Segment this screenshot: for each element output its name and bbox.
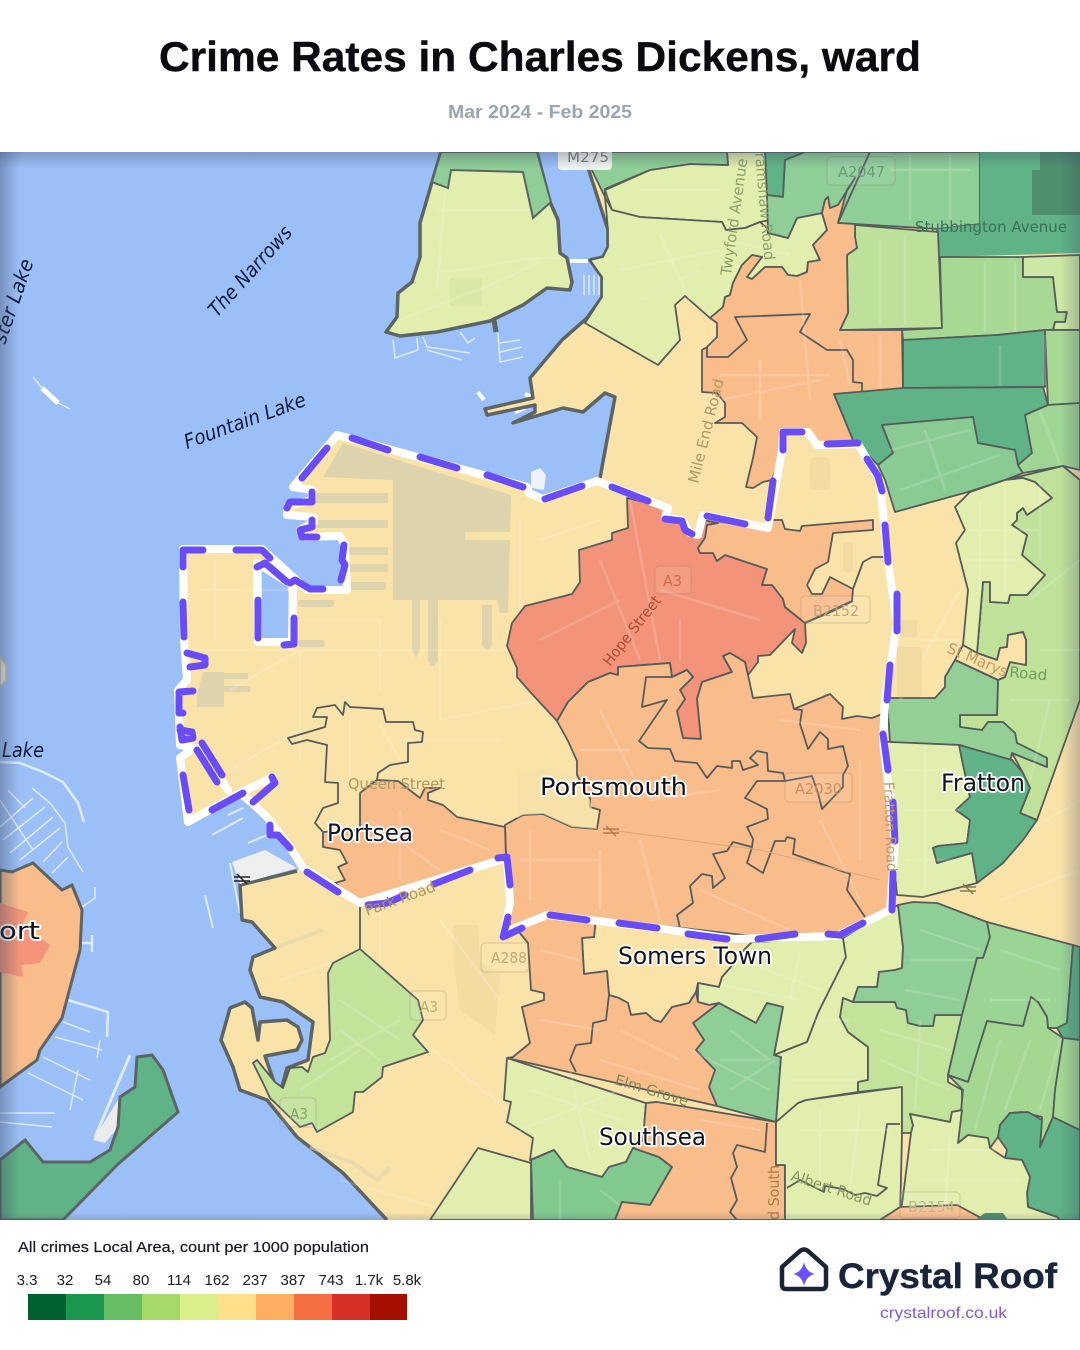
albert road: Albert Road: [789, 1167, 874, 1210]
dark green top strip: [765, 152, 805, 197]
lsoa: b2154 dark green corner: [975, 1213, 1008, 1220]
ramshaw road: ramshaw Road: [751, 152, 778, 261]
fratton station icon: [960, 884, 976, 894]
a3 south west: A3: [290, 1105, 308, 1123]
lsoa: fratton lime: [883, 741, 977, 897]
land base yellow: [178, 152, 1080, 1220]
green band: [838, 152, 980, 229]
green block 2: [902, 257, 1067, 340]
b2154: B2154: [908, 1198, 955, 1216]
portsmouth station icon: [603, 826, 619, 836]
dark band north east: [938, 152, 1080, 257]
twyford avenue: Twyford Avenue: [717, 157, 751, 278]
lsoa: somers town lime: [698, 938, 846, 1055]
lsoa: east mid green: [960, 466, 1080, 820]
place labels: [0, 769, 1025, 1151]
fratton road: Fratton Road: [880, 782, 899, 872]
marinas and jetties: [0, 261, 599, 1137]
pale shore fragment: [0, 657, 6, 687]
lsoa: green next: [948, 997, 1063, 1148]
lsoa: east lime: [776, 1087, 902, 1220]
lsoa: south orange: [507, 912, 719, 1106]
portsea street texture: [190, 520, 1080, 1220]
legend colour bar: [28, 1294, 407, 1320]
gosport red area: [0, 903, 50, 977]
a3: A3: [663, 572, 682, 590]
island light green: [386, 152, 572, 336]
lsoa: north east greens: [834, 387, 1080, 512]
a288 shield: [481, 943, 529, 972]
lsoa: east edge dark column: [1057, 945, 1080, 1040]
lsoa: southsea orange: [615, 1102, 785, 1220]
lsoa: south east lime: [900, 1110, 1060, 1220]
water labels: [0, 221, 309, 762]
mid green block: [840, 225, 942, 330]
north lime block 1: [605, 152, 770, 230]
queen street: Queen Street: [348, 775, 445, 793]
station park patch: [517, 768, 597, 829]
inner boundary: [707, 314, 862, 392]
coastline south: [221, 871, 387, 1220]
pier: [494, 320, 496, 332]
legend scale labels: 114: [167, 1272, 191, 1289]
lsoa: north greens: [765, 152, 1080, 405]
ferry terminal: [232, 850, 297, 884]
north green strip: [583, 152, 728, 197]
street texture south: [520, 930, 1060, 1220]
ferry station icon: [234, 874, 250, 884]
dark green block: [903, 330, 1045, 388]
gosport jetty: [93, 1100, 120, 1143]
footer legend and logo: [17, 1239, 1058, 1322]
website link: crystalroof.co.uk: [880, 1305, 1008, 1322]
legend scale labels: 80: [133, 1272, 149, 1289]
road labels: [290, 150, 1067, 1220]
map edge shading: [0, 152, 1080, 1220]
ort: ort: [0, 917, 40, 945]
dockyard grey blocks: [197, 443, 511, 707]
road shields: [280, 148, 960, 1218]
dockyard basin water: [262, 568, 292, 642]
date range subtitle: Mar 2024 - Feb 2025: [448, 101, 632, 122]
orange inner line: [730, 1123, 767, 1220]
park road: Park Road: [362, 878, 438, 920]
east edge mid green: [1053, 1038, 1080, 1130]
lsoa: southsea green: [531, 1148, 672, 1220]
lsoa: st marys yellow: [955, 632, 1026, 680]
lsoa: mid green block: [840, 998, 962, 1133]
a3 south: A3: [420, 998, 438, 1016]
lsoa: south east dark green: [998, 1112, 1080, 1220]
a2047: A2047: [838, 163, 885, 181]
choropleth map: [0, 152, 1080, 1220]
a288: A288: [491, 949, 527, 967]
east lime inner line: [787, 1124, 900, 1196]
road east: Road: [1009, 663, 1048, 684]
lsoa: portsea orange: [323, 780, 506, 903]
legend scale labels: 3.3: [17, 1272, 37, 1289]
lime block east: [1023, 255, 1080, 330]
coastline north: [485, 152, 615, 478]
lsoa: southsea green: [253, 949, 428, 1132]
harbour jetty at boundary: [531, 468, 546, 490]
lsoa: somers town yellow: [582, 918, 752, 1022]
north lime block 2: [585, 197, 827, 365]
header: [159, 33, 921, 122]
b2152: B2152: [813, 602, 859, 620]
lsoa: green block: [693, 1003, 783, 1122]
b2154 shield: [900, 1192, 960, 1218]
m275 shield: [558, 148, 612, 170]
legend scale labels: 54: [95, 1272, 111, 1289]
legend scale labels: 5.8k: [393, 1272, 422, 1289]
dotted park patches: [810, 457, 922, 697]
green east: [1018, 403, 1080, 473]
portsmouth: Portsmouth: [540, 773, 687, 801]
lsoa: green block north: [853, 902, 990, 1026]
b2152 shield: [801, 596, 870, 623]
lsoa: st marys green: [887, 660, 1047, 767]
island green north block: [432, 152, 551, 218]
logo wordmark: Crystal Roof: [838, 1257, 1057, 1296]
a3 south shield: [410, 991, 446, 1020]
legend scale labels: 1.7k: [355, 1272, 384, 1289]
d south: d South: [765, 1165, 783, 1220]
legend scale labels: 387: [280, 1272, 306, 1289]
somers town: Somers Town: [618, 942, 772, 970]
legend scale labels: 237: [242, 1272, 268, 1289]
lsoa: central orange: [505, 653, 895, 939]
north orange area: [702, 178, 903, 488]
logo icon: [782, 1250, 826, 1289]
green lower: [878, 417, 1023, 512]
title: Crime Rates in Charles Dickens, ward: [159, 33, 921, 80]
water background: [0, 152, 1080, 1220]
railway line: [610, 830, 880, 880]
lsoa: southsea lime: [504, 1058, 661, 1177]
fountain lake: Fountain Lake: [181, 387, 309, 454]
area: whale island: [386, 152, 572, 336]
lsoa: far south west lime: [430, 1148, 531, 1220]
charles dickens ward boundary dashes: [179, 432, 897, 939]
promenade and parks: [277, 925, 500, 1180]
legend scale labels: [17, 1272, 422, 1289]
st marys: St Marys: [944, 639, 1011, 681]
stubbington avenue: Stubbington Avenue: [915, 218, 1067, 236]
lsoa: hope street red: [507, 498, 806, 739]
green top block: [767, 152, 870, 238]
gosport green area: [0, 1055, 178, 1220]
a3 shield: [655, 566, 691, 594]
darkest corner: [1032, 152, 1080, 215]
central boundaries: [639, 677, 865, 928]
charles dickens ward boundary white: [178, 432, 897, 939]
a2047 shield: [827, 157, 895, 185]
railway station icons: [234, 826, 976, 894]
lsoa: b2154 orange corner: [880, 1205, 985, 1220]
fratton: Fratton: [941, 769, 1025, 797]
south orange inner line: [570, 995, 609, 1072]
a2030 shield: [785, 773, 852, 802]
the narrows: The Narrows: [203, 221, 297, 321]
lsoa: east lime: [955, 478, 1052, 653]
street texture east: [895, 480, 1080, 890]
portsea outline: [288, 702, 423, 832]
lsoa: green right strip: [948, 922, 1073, 1082]
north east ward line: [805, 557, 887, 623]
gosport orange area: [0, 863, 82, 1087]
a2030: A2030: [795, 780, 842, 798]
a3 south west shield: [280, 1098, 316, 1127]
elm grove: Elm Grove: [613, 1073, 690, 1110]
portsea: Portsea: [327, 819, 413, 847]
lsoa: ward north east orange: [698, 520, 873, 623]
mile end road: Mile End Road: [684, 377, 728, 485]
legend scale labels: 743: [318, 1272, 344, 1289]
green east: [1045, 330, 1080, 405]
hope street: Hope Street: [599, 592, 665, 669]
legend scale labels: 162: [204, 1272, 230, 1289]
dark green lower: [834, 387, 1048, 465]
lake: Lake: [2, 738, 44, 762]
park road boundary: [359, 905, 361, 949]
southsea: Southsea: [599, 1123, 706, 1151]
island pale field: [450, 278, 482, 306]
area: gosport: [0, 863, 178, 1220]
lsoa: north lime: [583, 152, 827, 365]
legend title: All crimes Local Area, count per 1000 population: [18, 1239, 369, 1256]
lsoa: fratton dark green: [933, 745, 1037, 883]
lsoa: central lime: [774, 905, 903, 1122]
legend scale labels: 32: [57, 1272, 73, 1289]
lsoa: north orange: [702, 178, 903, 488]
